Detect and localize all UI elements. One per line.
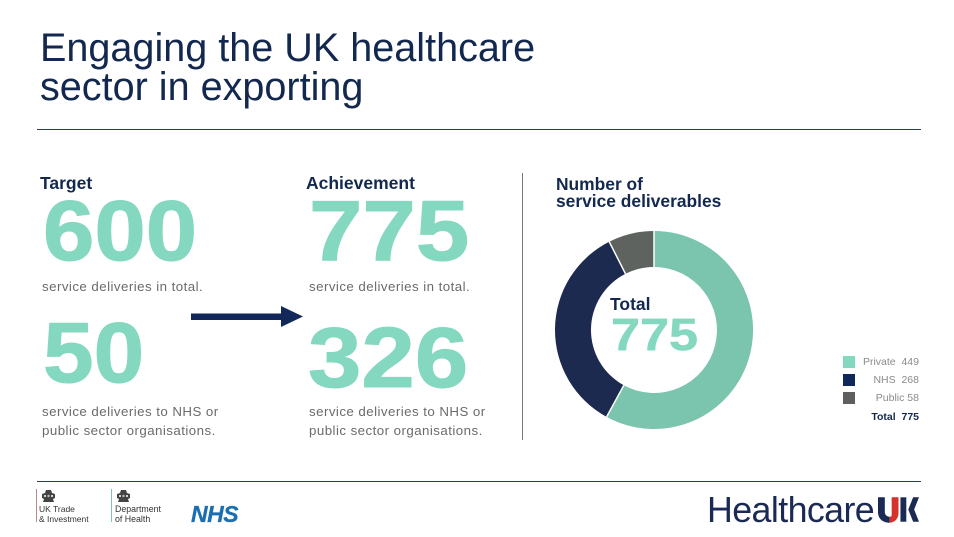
logo: UK Trade & Investment <box>36 489 89 524</box>
icon: crest <box>42 490 55 502</box>
legend <box>843 356 919 423</box>
panel: target <box>40 173 219 438</box>
legend label: private: Private 449 <box>863 356 919 368</box>
logo: Healthcare UK <box>707 490 919 530</box>
legend label: NHS: NHS 268 <box>873 374 919 386</box>
title: Engaging the UK healthcare <box>40 26 535 70</box>
caption: 775 achieved: service deliveries in total. <box>309 279 470 294</box>
number: 326: 326 <box>308 311 468 406</box>
legend total: Total 775 <box>871 411 919 423</box>
logo text: of Health <box>115 514 150 524</box>
donut chart <box>555 231 753 429</box>
logo text: UK Trade <box>39 504 75 514</box>
legend swatch: private <box>843 356 855 368</box>
logo text: & Investment <box>39 514 89 524</box>
caption: 600 target: service deliveries in total. <box>42 279 203 294</box>
caption: 50 target: service deliveries to NHS or <box>42 404 219 419</box>
caption: 326 achieved: service deliveries to NHS or <box>309 404 486 419</box>
legend swatch: public <box>843 392 855 404</box>
number: 600: 600 <box>43 184 197 279</box>
caption: 50 target: public sector organisations. <box>42 422 216 438</box>
logo: Department of Health <box>111 489 161 524</box>
caption: 326 achieved <box>309 404 486 438</box>
heading: number of service deliverables: service deliverables <box>556 191 721 211</box>
donut label: total: Total <box>610 294 651 314</box>
logo text <box>39 504 89 524</box>
logo: NHS: NHS <box>191 501 238 527</box>
number: 775: 775 <box>309 184 469 279</box>
logo wordmark: Healthcare <box>707 490 874 530</box>
title <box>40 26 535 108</box>
caption: 326 achieved: public sector organisations. <box>309 422 483 438</box>
number: 50: 50 <box>43 306 144 401</box>
heading: achievement: Achievement <box>306 173 415 193</box>
panel: achievement <box>306 173 486 438</box>
heading: target: Target <box>40 173 92 193</box>
title: sector in exporting <box>40 64 363 108</box>
heading: number of service deliverables: Number of <box>556 174 643 194</box>
logo text <box>115 504 161 524</box>
legend swatch: NHS <box>843 374 855 386</box>
donut number: 775: 775 <box>611 308 698 360</box>
arrow <box>191 306 303 327</box>
heading: number of service deliverables <box>556 174 721 211</box>
logo text: Department <box>115 504 161 514</box>
logo mark: UK <box>878 497 919 523</box>
caption: 50 target <box>42 404 219 438</box>
icon: crest <box>117 490 130 502</box>
legend label: public: Public 58 <box>876 392 919 404</box>
